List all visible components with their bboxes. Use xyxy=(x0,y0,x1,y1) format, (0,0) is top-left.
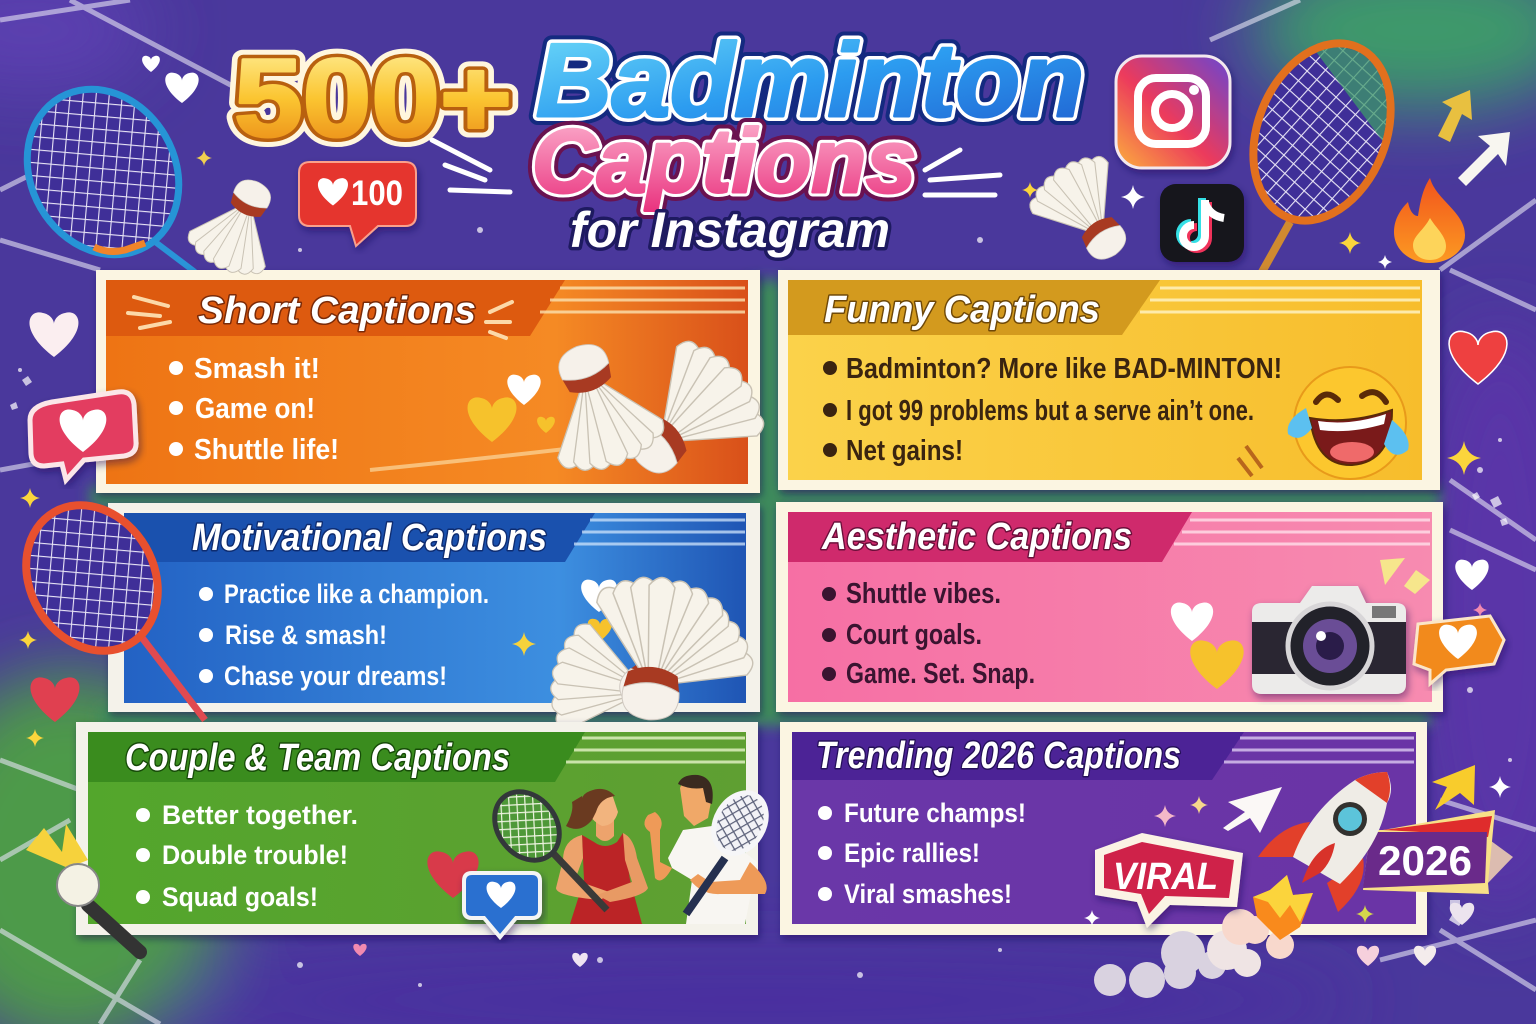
hearts xyxy=(512,580,617,656)
bullets: Badminton? More like BAD-MINTON! xyxy=(846,353,1282,385)
shuttlecocks xyxy=(540,565,772,753)
title: Captions: Captions xyxy=(532,112,916,212)
racket: woman xyxy=(481,779,607,910)
panel fill xyxy=(792,732,1416,924)
heading: Motivational Captions xyxy=(192,517,547,559)
rocket centre fin xyxy=(1302,843,1335,883)
bullets xyxy=(823,353,1282,467)
title: 500+: 500+ xyxy=(234,37,512,160)
player: man xyxy=(644,775,767,924)
icon: laughing emoji xyxy=(1288,367,1409,479)
icon: yellow shuttle bottom left xyxy=(26,824,140,952)
rocket fins xyxy=(1258,822,1310,857)
header band xyxy=(788,280,1160,335)
icon: heart bubble blue xyxy=(464,873,540,937)
heading: Trending 2026 Captions xyxy=(816,735,1181,777)
bullets: Net gains! xyxy=(846,435,963,467)
bullets: Shuttle vibes. xyxy=(846,578,1001,610)
icon: rocket xyxy=(1253,772,1391,940)
panel fill xyxy=(788,280,1422,480)
panel fill xyxy=(106,280,748,484)
icon: heart bubble right xyxy=(1414,616,1504,684)
rocket nose xyxy=(1355,772,1390,803)
icon: viral bubble xyxy=(1095,833,1243,928)
bullets: Better together. xyxy=(162,800,358,830)
racket: man xyxy=(686,783,777,914)
frame xyxy=(76,722,758,935)
rocket window xyxy=(1333,802,1367,836)
panel: trending 2026 captions xyxy=(780,722,1427,935)
heading: Couple & Team Captions xyxy=(125,737,510,779)
frame xyxy=(778,270,1440,490)
icon: paper plane arrow xyxy=(1223,787,1282,833)
icon: flame xyxy=(1394,178,1465,263)
decorative hearts and sparkles xyxy=(19,56,1507,747)
header band xyxy=(106,280,565,336)
bullets: I got 99 problems but a serve ain’t one. xyxy=(846,395,1254,427)
icon: tiktok xyxy=(1160,184,1244,262)
title: for Instagram: for Instagram xyxy=(570,202,890,258)
bullets: Double trouble! xyxy=(162,840,348,870)
bullets: Game on! xyxy=(195,393,315,425)
title: Badminton: Badminton xyxy=(536,23,1084,139)
confetti xyxy=(1380,558,1430,594)
motion lines xyxy=(1238,446,1262,476)
title xyxy=(234,23,1084,258)
bullets: Smash it! xyxy=(194,353,320,385)
icon: camera xyxy=(1252,586,1406,694)
panel: couple and team captions xyxy=(76,722,777,937)
title: 500+: 500+ xyxy=(234,37,512,160)
bullets xyxy=(169,353,339,466)
bullets: Future champs! xyxy=(844,798,1026,828)
panel: short captions xyxy=(96,270,783,510)
racket top left xyxy=(0,62,208,282)
panel fill xyxy=(88,732,746,924)
icon: flame core xyxy=(1413,218,1446,260)
bullets: Rise & smash! xyxy=(225,620,387,650)
frame xyxy=(96,270,760,493)
bullets xyxy=(199,579,489,691)
racket top right xyxy=(1249,39,1395,270)
icon: like bubble 100: 100 xyxy=(351,174,403,213)
hearts xyxy=(468,375,555,442)
header band xyxy=(124,513,595,562)
hearts xyxy=(427,851,479,898)
shuttlecocks xyxy=(520,323,783,510)
icon: like bubble 100 xyxy=(299,162,416,246)
icon: heart bubble left xyxy=(30,392,136,480)
bullets xyxy=(136,800,358,912)
panel fill xyxy=(788,512,1432,702)
hearts xyxy=(1171,603,1244,689)
bullets: Court goals. xyxy=(846,619,982,651)
bullets: Squad goals! xyxy=(162,882,318,912)
title: Badminton: Badminton xyxy=(536,23,1084,139)
icon: 2026 ribbon xyxy=(1363,810,1513,894)
title: 500+: 500+ xyxy=(234,37,512,160)
smoke cloud xyxy=(1094,909,1294,998)
panel: motivational captions xyxy=(108,503,772,753)
heading: Aesthetic Captions xyxy=(821,516,1132,558)
racket motivational xyxy=(0,481,205,720)
players xyxy=(481,775,777,924)
shuttlecock top left xyxy=(178,163,299,287)
bullets: Chase your dreams! xyxy=(224,661,447,691)
header band xyxy=(788,512,1192,562)
frame xyxy=(108,503,760,712)
title: Captions: Captions xyxy=(532,112,916,212)
accent xyxy=(128,297,512,338)
header band xyxy=(88,732,585,782)
player: woman xyxy=(556,789,648,924)
frame xyxy=(776,502,1443,712)
frame xyxy=(780,722,1427,935)
bullets xyxy=(822,578,1035,690)
bullets: Shuttle life! xyxy=(194,434,339,466)
bullets: Viral smashes! xyxy=(844,879,1012,909)
burst lines around title xyxy=(432,140,1000,195)
header band xyxy=(792,732,1244,780)
bullets: Practice like a champion. xyxy=(224,579,489,609)
icon: viral bubble: VIRAL xyxy=(1113,856,1218,898)
panel: aesthetic captions xyxy=(776,502,1504,712)
title: Badminton: Badminton xyxy=(536,23,1084,139)
bullets xyxy=(818,798,1026,909)
icon: instagram xyxy=(1116,56,1230,168)
title: Captions: Captions xyxy=(532,112,916,212)
shuttlecock top right xyxy=(1017,142,1156,282)
bullets: Game. Set. Snap. xyxy=(846,658,1035,690)
panel fill xyxy=(124,513,746,703)
ribbon text: 2026 xyxy=(1378,837,1472,884)
sparkles bottom xyxy=(353,776,1511,967)
rocket flame xyxy=(1253,875,1313,940)
icon: yellow arrow xyxy=(1432,765,1475,810)
heading: Funny Captions xyxy=(824,289,1100,331)
rocket body xyxy=(1293,772,1391,884)
heading: Short Captions xyxy=(198,290,476,332)
bullets: Epic rallies! xyxy=(844,838,980,868)
panel: funny captions xyxy=(778,270,1440,490)
icon: arrows up xyxy=(1438,90,1510,186)
